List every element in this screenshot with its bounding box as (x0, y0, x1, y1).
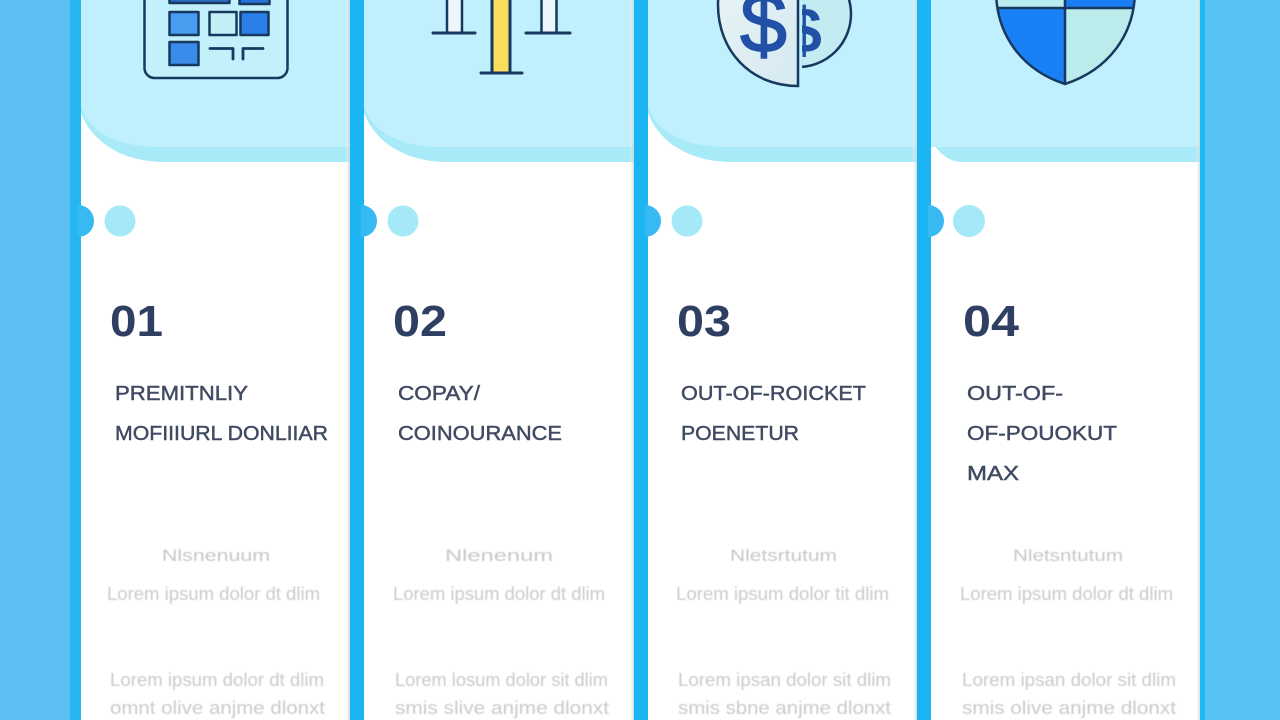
card 02 body text: Nlenenum (445, 546, 553, 565)
card 04 body text: Nletsntutum (1013, 546, 1123, 565)
card 04 title: OUT-OF- (967, 383, 1063, 405)
card 02 body text: Lorem ipsum dolor dt dlim (393, 584, 605, 604)
card 03 dot (672, 206, 702, 236)
panel: card 04 out-of-pocket max (928, 0, 1200, 720)
card 01 number: 01 (110, 297, 163, 346)
card 03 body text: smis sbne anjme dlonxt (678, 698, 891, 718)
left blue bar (70, 0, 81, 720)
card 02 body text (393, 546, 609, 718)
card 03 title: POENETUR (681, 423, 799, 445)
card 01 body text (107, 546, 325, 718)
card 04 dot (953, 205, 985, 237)
card 01 body text: Nlsnenuum (162, 546, 270, 565)
divider bars (350, 0, 1205, 720)
card 01 tab dot (78, 205, 94, 237)
panel: card 02 copay (361, 0, 634, 720)
card 02 body text: smis slive anjme dlonxt (395, 698, 609, 718)
card 03 body text (676, 546, 891, 718)
card 03 header (648, 0, 917, 162)
card 01 dot (104, 206, 136, 236)
panel: card 01 premium (78, 0, 350, 720)
card 01 title: PREMITNLIY (115, 383, 248, 405)
card 03 body text: Lorem ipsum dolor tit dlim (676, 584, 889, 604)
card 04 body text: Lorem ipsum dolor dt dlim (960, 584, 1173, 604)
card 04 title: OF-POUOKUT (967, 423, 1117, 445)
card 02 body text: Lorem losum dolor sit dlim (395, 670, 608, 690)
card 01 body text: omnt olive anjme dlonxt (110, 698, 325, 718)
card 03 title (681, 383, 866, 445)
icon: shield (990, 0, 1140, 87)
card 04 body text: Lorem ipsan dolor sit dlim (962, 670, 1176, 690)
icon: calendar (144, 0, 288, 78)
icon: split dollar coin (718, 0, 851, 86)
icon: balance posts (433, 0, 570, 73)
card 02 title: COPAY/ (398, 383, 480, 405)
panel: card 03 out-of-pocket (645, 0, 917, 720)
card 02 title: COINOURANCE (398, 423, 562, 445)
card 04 body text: smis olive anjme dlonxt (962, 698, 1176, 718)
card 03 number: 03 (677, 297, 731, 346)
card 02 title (398, 383, 562, 445)
card 02 number: 02 (393, 297, 447, 346)
card 01 header (81, 0, 350, 162)
card 04 tab dot (928, 205, 944, 237)
card 04 number: 04 (963, 297, 1020, 346)
card 04 body text (960, 546, 1176, 718)
background right area (1204, 0, 1280, 720)
card 01 title (115, 383, 328, 445)
card 01 body text: Lorem ipsum dolor dt dlim (107, 584, 320, 604)
card 02 header (364, 0, 634, 162)
card 02 dot (388, 206, 418, 236)
card 01 body text: Lorem ipsum dolor dt dlim (110, 670, 324, 690)
card 01 title: MOFIIIURL DONLIIAR (115, 423, 328, 445)
card 03 tab dot (645, 205, 661, 237)
card 04 title (967, 383, 1117, 485)
card 04 title: MAX (967, 463, 1019, 485)
card 02 tab dot (361, 205, 377, 237)
card 04 header (931, 0, 1200, 162)
card 03 body text: Lorem ipsan dolor sit dlim (678, 670, 891, 690)
card 03 title: OUT-OF-ROICKET (681, 383, 866, 405)
card 03 body text: Nletsrtutum (730, 546, 837, 565)
